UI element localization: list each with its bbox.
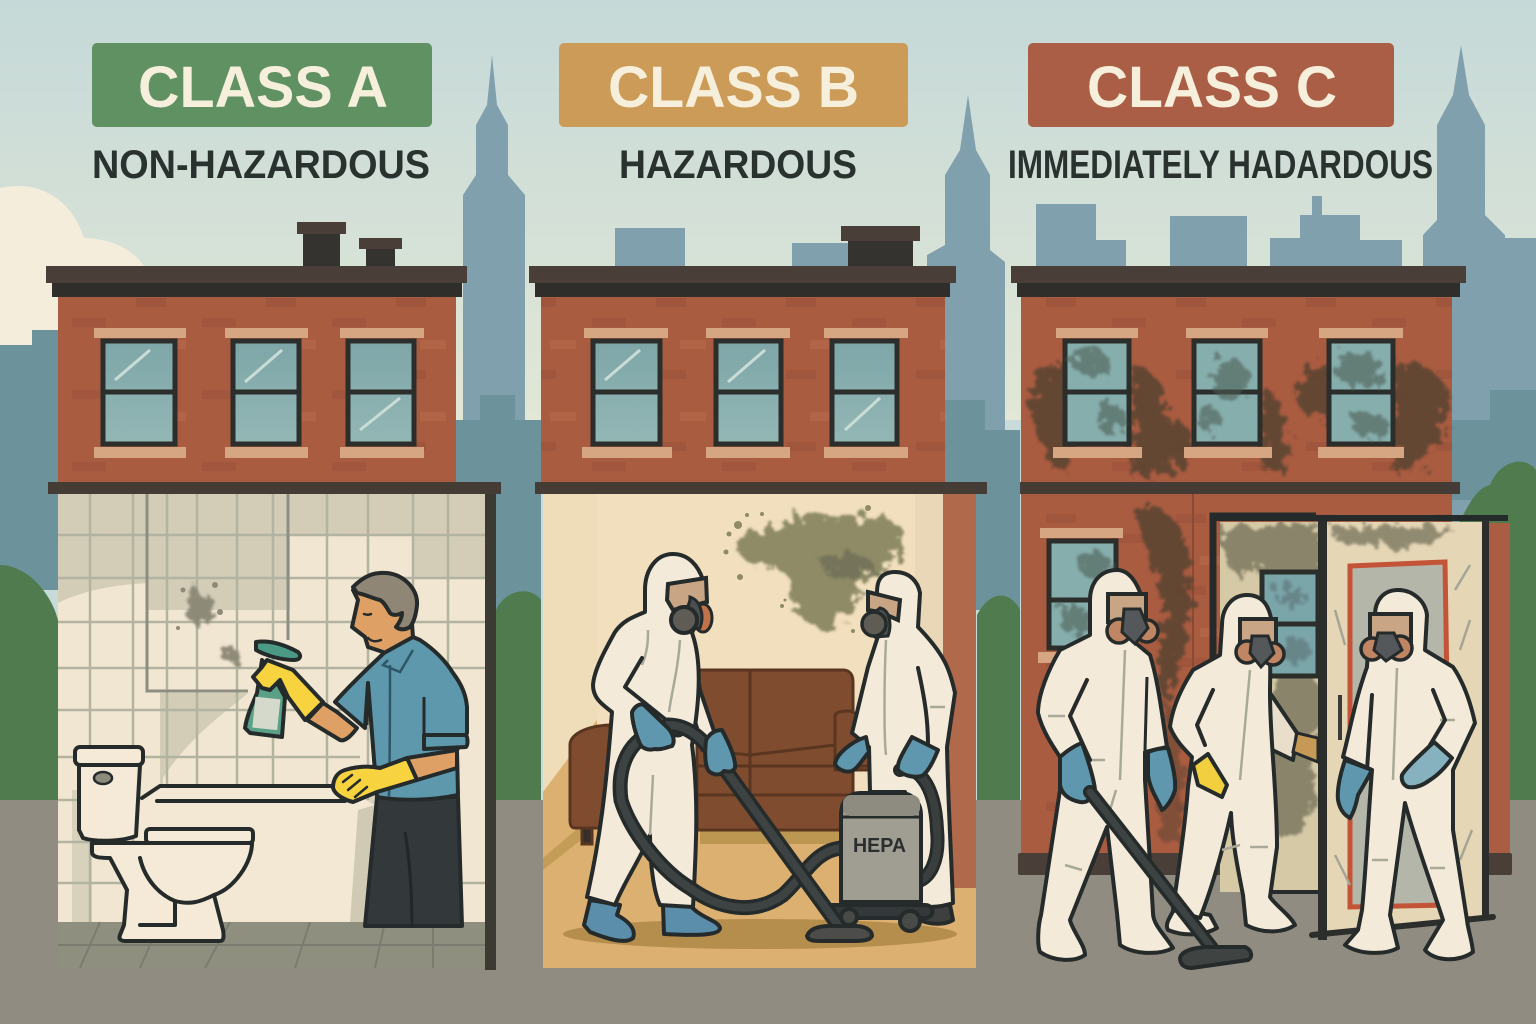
heading: class A — [92, 43, 432, 187]
person cleaning — [245, 573, 468, 926]
heading: class C: CLASS C — [1087, 55, 1337, 120]
doorway opening — [1213, 516, 1323, 892]
city skyline — [0, 45, 1536, 610]
mold patch B — [724, 505, 906, 633]
open door — [1213, 518, 1508, 940]
worker right — [852, 572, 955, 924]
bathroom interior — [58, 494, 496, 970]
cloud — [0, 186, 145, 345]
toilet — [75, 747, 253, 941]
sky — [0, 0, 1536, 420]
trees — [0, 462, 1536, 800]
vacuum cleaner: HEPA — [853, 835, 906, 857]
panel: class C building — [1011, 266, 1512, 968]
roof C — [1011, 266, 1466, 297]
heading: class B: HAZARDOUS — [619, 143, 857, 187]
vacuum cleaner — [832, 793, 932, 931]
vacuum hose — [620, 729, 938, 908]
respirator 1 — [1107, 594, 1158, 644]
mid skyline — [0, 330, 1536, 610]
upper storey A — [46, 222, 467, 483]
upper mold patches — [1030, 362, 1448, 840]
heading: class B — [559, 43, 908, 187]
room interior — [543, 494, 976, 968]
respirator right — [862, 592, 900, 637]
sofa — [570, 670, 870, 844]
ledge B — [535, 482, 987, 494]
vacuum wand C — [1090, 792, 1251, 968]
heading: class C: IMMEDIATELY HADARDOUS — [1008, 143, 1433, 187]
windows C — [1038, 328, 1404, 663]
base C — [1018, 853, 1512, 875]
respirator left — [667, 578, 712, 633]
panel: class B building — [529, 226, 987, 968]
respirator 3 — [1361, 614, 1412, 661]
ledge C — [1020, 482, 1460, 494]
upper storey B — [529, 226, 956, 483]
worker left — [584, 554, 720, 941]
worker 1 — [1038, 570, 1175, 960]
heading: class B: CLASS B — [608, 55, 859, 120]
heading: class C — [1008, 43, 1433, 187]
respirator 2 — [1236, 619, 1284, 667]
walls C — [1021, 297, 1510, 854]
far towers — [463, 45, 1536, 560]
spray bottle — [245, 642, 300, 737]
gloves B — [632, 704, 938, 777]
ledge A — [48, 482, 501, 494]
bathtub — [140, 786, 375, 922]
ground — [0, 800, 1536, 1024]
panel: class A building — [46, 222, 501, 970]
vacuum wand B — [668, 725, 872, 941]
heading: class A: CLASS A — [138, 55, 388, 120]
worker 2 — [1167, 595, 1318, 934]
worker 3 — [1338, 590, 1475, 959]
mold spot A — [176, 582, 239, 663]
heading: class A: NON-HAZARDOUS — [92, 143, 430, 187]
